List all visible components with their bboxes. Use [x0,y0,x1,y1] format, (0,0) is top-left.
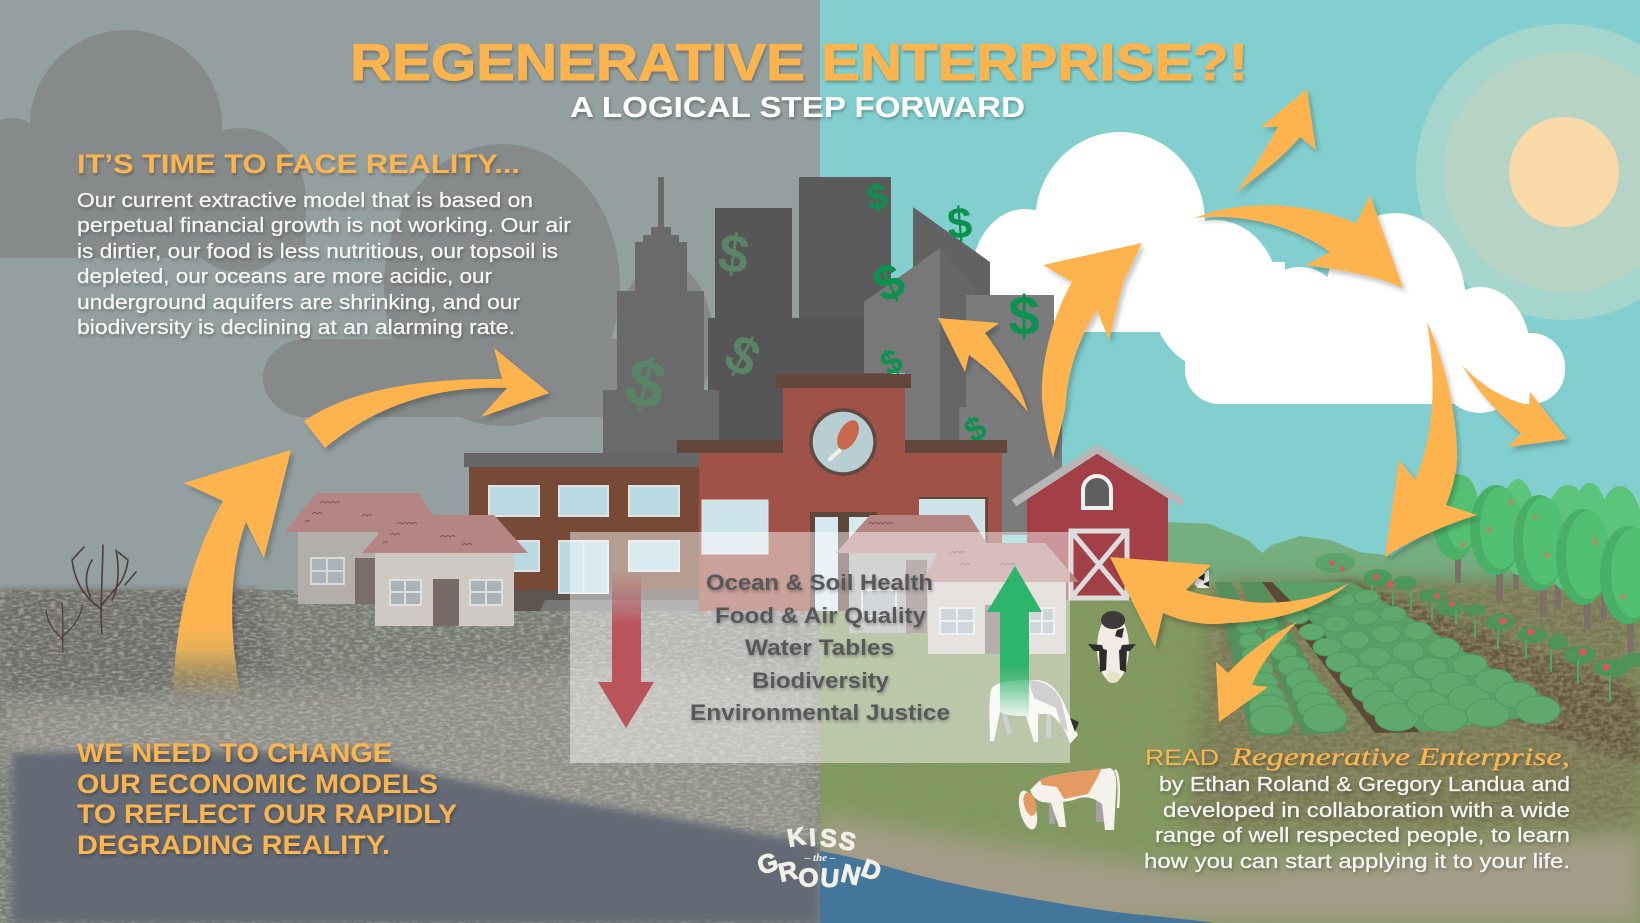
dollar signs muted: $ [714,222,753,286]
arrow: red down [598,570,654,728]
school brown wing [464,453,702,611]
arrow: right lower small [1462,365,1567,447]
cow grey [989,680,1079,744]
panel list: health indicators: Ocean & Soil Health [706,570,933,595]
logo: Kiss the Ground: KISS [785,822,858,857]
arrow: curved over cloud [1194,195,1403,288]
logo: Kiss the Ground [753,822,885,894]
side roofs [677,440,783,453]
dollar signs green: $ [863,175,890,219]
tower cap [776,374,911,388]
book recommendation text: range of well respected people, to learn [1155,825,1570,847]
dollar signs muted: $ [715,323,770,390]
book recommendation text: developed in collaboration with a wide [1163,800,1570,822]
icon: sun [1416,24,1640,320]
book recommendation text: READ [1145,745,1219,770]
callout: change economic models [77,738,457,860]
door [810,512,877,611]
logo: Kiss the Ground: GROUND [753,846,885,894]
dollar signs green: $ [864,251,913,314]
cow partial behind arrow [1194,570,1209,588]
cow brown and white [1015,768,1119,831]
white cloud upper [972,132,1285,370]
arrow: upper right small [1235,89,1316,193]
dollar signs green: $ [874,341,909,384]
panel list: health indicators: Biodiversity [752,668,890,693]
dark tower block [708,208,880,460]
house right back [836,515,993,633]
white cloud lower [1185,213,1565,413]
book recommendation text: Regenerative Enterprise, [1230,744,1570,771]
dollar signs green [863,175,1040,451]
arrow: large rising from barn [1042,243,1142,458]
body text: extractive model: Our current extractive model that is based on [77,190,533,212]
book recommendation text: how you can start applying it to your life. [1144,851,1570,873]
title [350,34,1248,124]
city skyline [603,177,1062,535]
pitched grey tower [864,248,940,440]
book recommendation text: by Ethan Roland & Gregory Landua and [1159,774,1570,796]
logo: Kiss the Ground: – the – [804,852,836,864]
clock with drumstick icon [811,410,875,474]
body text: extractive model: perpetual financial growth is not working. Our air [77,215,571,237]
panel list: health indicators: Food & Air Quality [715,603,927,628]
house left front [362,515,528,626]
arrow: green up [987,566,1042,720]
triangular dark tower [913,207,990,460]
distant hills [1168,522,1526,585]
background: clean blue sky [820,0,1640,600]
callout: change economic models: DEGRADING REALITY. [77,830,390,860]
house left back [285,493,445,604]
bare tree small [46,603,82,652]
barn door [1071,531,1127,598]
cow holstein [1088,611,1136,683]
background: grey polluted sky [0,0,820,600]
house right front [922,543,1079,654]
arrow: left curved toward city [304,348,549,448]
barn [1014,449,1183,600]
stepped grey tower [959,295,1062,535]
crop field of cabbages [1215,582,1562,735]
panel list: health indicators [690,570,950,725]
bare tree large [72,545,136,633]
dollar signs green: $ [1008,284,1040,347]
dollar signs muted [618,222,770,425]
arrow: small down-left [1216,622,1297,722]
callout: change economic models: WE NEED TO CHANGE [77,738,392,768]
translucent metrics panel [570,532,1070,763]
callout: change economic models: OUR ECONOMIC MODELS [77,769,438,799]
body text: extractive model: underground aquifers are shrinking, and our [77,292,520,314]
arrow: field to barn [1110,557,1349,647]
body text: extractive model: depleted, our oceans are more acidic, our [77,266,492,288]
book recommendation text [1144,744,1570,873]
subtitle: A LOGICAL STEP FORWARD [570,92,1025,124]
dollar signs muted: $ [618,342,673,425]
body text: extractive model: biodiversity is declining at an alarming rate. [77,317,515,339]
arrow: right big downward [1385,322,1477,557]
heading: face reality: IT’S TIME TO FACE REALITY... [77,149,520,179]
tall dark tower [799,177,891,457]
panel list: health indicators: Environmental Justice [690,700,950,725]
fruit trees [1432,474,1640,652]
ground: regenerated land [820,522,1640,923]
callout: change economic models: TO REFLECT OUR RAPIDLY [77,799,457,829]
dollar signs green: $ [958,408,993,451]
arrow: left large upward [173,450,291,703]
dollar signs green: $ [945,198,974,249]
stepped skyscraper with spire [603,177,719,460]
body text: extractive model: is dirtier, our food is less nutritious, our topsoil is [77,241,558,263]
ground: degraded land [0,590,820,923]
dead trees [46,545,136,652]
windows [702,500,768,554]
tomato plants [1315,553,1640,702]
title: REGENERATIVE ENTERPRISE?! [350,34,1248,92]
school red main block [677,374,1007,611]
panel list: health indicators: Water Tables [745,635,894,660]
body text: extractive model [77,190,571,339]
dark storm cloud upper left [0,30,306,272]
arrow: toward city [938,318,1028,412]
dark storm cloud middle [263,144,713,426]
barn arch window [1083,476,1111,508]
